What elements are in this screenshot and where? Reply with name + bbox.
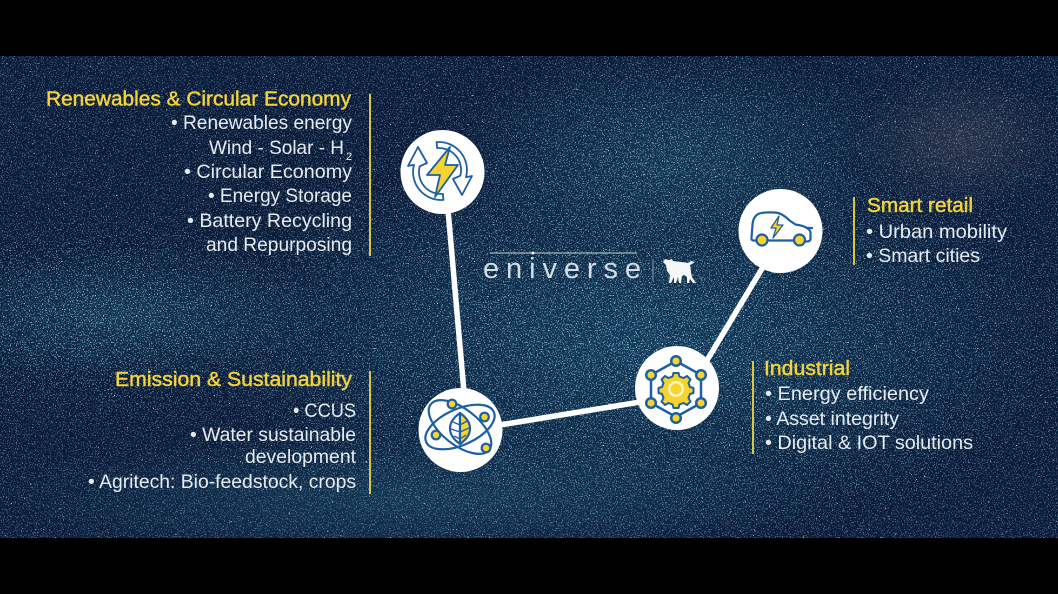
text block: renewables and circular economy: and Repurposing: [206, 234, 352, 256]
text block: industrial: • Energy efficiency: [765, 383, 929, 405]
icon: gear: [658, 373, 694, 408]
heading: renewables: Renewables & Circular Economy: [46, 88, 351, 110]
text block: emission and sustainability: • Water sustainable: [190, 424, 356, 446]
text block: renewables and circular economy: • Battery Recycling: [187, 210, 352, 232]
text block: renewables and circular economy: [46, 88, 371, 256]
icon: leaf: [450, 413, 470, 444]
connector lines between the nodes: [448, 210, 763, 425]
heading: smart retail: Smart retail: [867, 195, 973, 217]
node: industrial icon: [635, 346, 719, 430]
text block: emission and sustainability: • Agritech: Bio-feedstock, crops: [88, 471, 356, 493]
text block: renewables and circular economy: Wind - Solar - H: [209, 137, 344, 159]
icon: orbit electrons: [432, 400, 490, 452]
node: renewables icon: [400, 130, 484, 214]
text block: renewables and circular economy: • Circular Economy: [184, 161, 352, 183]
icon: car: [751, 212, 812, 242]
heading: emission: Emission & Sustainability: [115, 369, 352, 391]
text block: smart retail: [853, 195, 1007, 267]
text block: renewables and circular economy: 2: [346, 151, 352, 163]
icon: six-legged dog: [663, 259, 696, 283]
icon: lightning bolt: [427, 147, 458, 197]
text block: renewables and circular economy: • Renewables energy: [171, 112, 352, 134]
logo: eniverse: eniverse: [483, 253, 641, 285]
text block: emission and sustainability: • CCUS: [293, 400, 356, 422]
node: electric car icon: [738, 189, 822, 273]
heading: industrial: Industrial: [764, 358, 850, 380]
icon: hexagon network: [646, 356, 706, 423]
icon: car bolt: [771, 216, 783, 238]
text block: emission and sustainability: [88, 369, 371, 494]
text block: industrial: [752, 358, 973, 454]
icon: car wheels: [756, 234, 805, 246]
text block: industrial: • Digital & IOT solutions: [765, 432, 973, 454]
text block: smart retail: • Urban mobility: [866, 221, 1007, 243]
text block: industrial: • Asset integrity: [765, 408, 899, 430]
node: sustainability icon: [418, 388, 502, 472]
icon: atom orbits: [419, 390, 501, 464]
text block: emission and sustainability: development: [245, 446, 357, 468]
icon: circular arrows: [408, 142, 472, 200]
text block: renewables and circular economy: • Energy Storage: [208, 185, 352, 207]
text block: smart retail: • Smart cities: [866, 245, 980, 267]
